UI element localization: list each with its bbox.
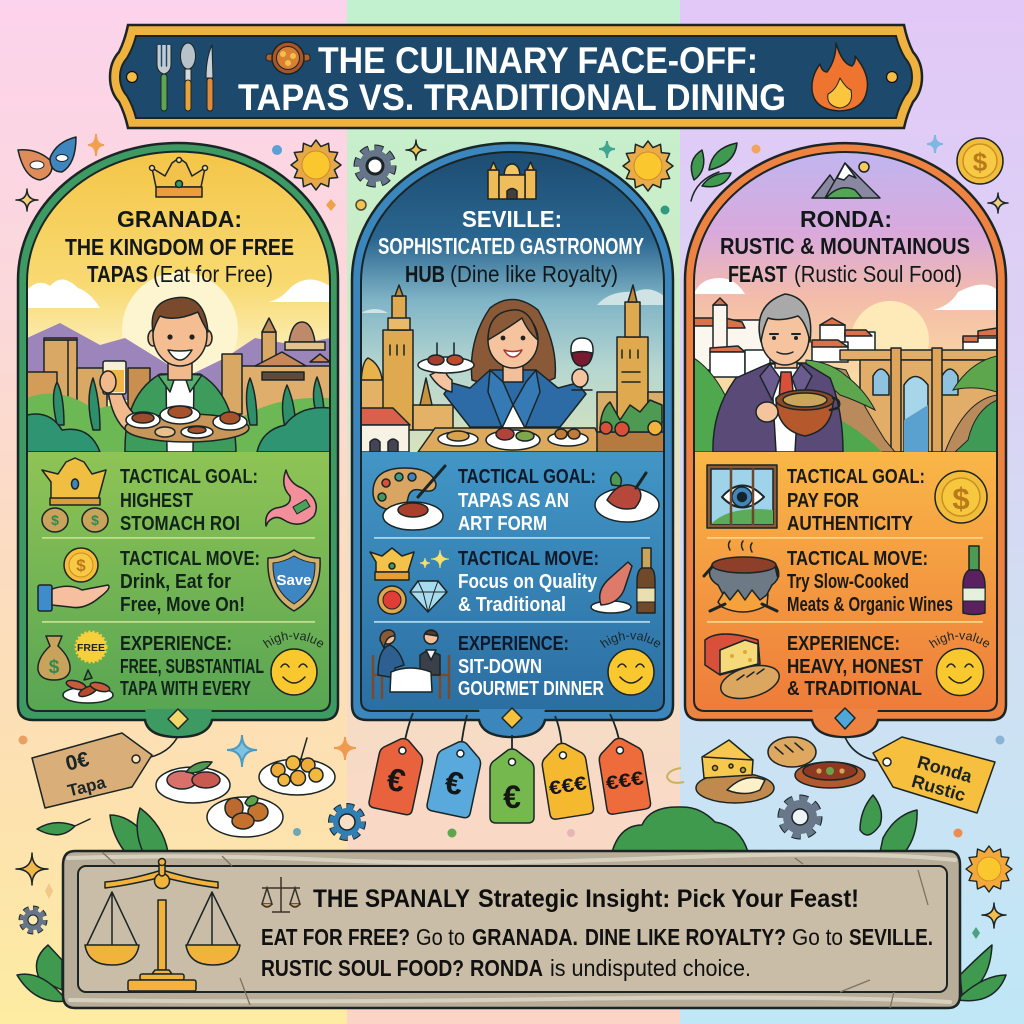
row: experience [37,630,324,704]
divider [707,621,983,623]
insight line one [261,924,933,950]
text: experience: HEAVY, HONEST [787,655,923,678]
icon: sausage plate [63,670,113,703]
tag string [136,738,177,759]
insight line one: Go to [416,924,465,950]
icon: stomach [266,470,316,526]
decorations: right top [691,135,1008,213]
text: experience: GOURMET DINNER [458,677,604,700]
row: tactical move [370,547,655,616]
background: left column [0,0,348,1024]
scene: Seville skyline [361,148,667,452]
tag: yellow euros [539,740,594,820]
icon: gear [359,150,391,182]
icon: wine bottle [637,548,655,613]
icon: notch star [502,708,522,728]
icon: leaves [691,143,737,201]
tag: Ronda Rustic: Rustic [909,771,968,805]
icon: dinner couple [373,630,449,698]
icon: swirl [667,768,684,783]
rim highlights [68,854,955,1002]
scene: Granada skyline [27,148,330,452]
background: middle column [347,0,681,1024]
icon: notch star [168,709,188,729]
heading: Granada: GRANADA: [117,206,242,232]
insight line two: RONDA [470,955,543,981]
icon: leaves left [17,945,66,1001]
icon: orange star [88,134,104,156]
divider [42,621,315,623]
tag: red euro [368,734,426,816]
row: tactical goal [373,465,659,535]
icon: teal star [599,141,615,158]
icon: flame [812,43,868,111]
tag: orange euros: €€€ [604,768,646,795]
background: right column [680,0,1024,1024]
icon: knife [206,45,213,111]
icon: gold star [406,140,426,160]
icon: notch star [835,708,855,729]
icon: gold star [16,189,38,211]
icon: coin [935,471,987,523]
text: move: Drink, Eat for [120,570,231,593]
inner border [694,152,997,711]
icon: crown with money bags [42,458,108,532]
insight heading: THE SPANALY [313,885,470,913]
plate: sliced meat [156,762,230,803]
text: experience [787,632,923,700]
teal dot [660,206,670,214]
plate: croquettes [207,796,283,837]
table with plates [418,400,667,452]
orange dot [18,736,28,744]
text: move: Meats & Organic Wines [787,593,953,616]
tag string [845,737,887,762]
icon: sun [623,141,673,191]
icon: smiley high-value: high-value [600,632,660,648]
heading: Ronda: (Rustic Soul Food) [794,261,962,287]
text: move: & Traditional [458,593,566,616]
tag body [32,733,152,808]
text: experience: TAPA WITH EVERY [120,677,251,700]
icon: money bag [38,636,70,680]
icon: gray gear [783,800,817,834]
notch [812,709,878,736]
icon: ruby [378,586,406,614]
heading: Ronda [720,206,970,287]
tag: green euro: € [503,779,521,815]
heading: Seville: SEVILLE: [462,206,562,232]
character: older man with pot [713,294,843,452]
heading: Ronda: RUSTIC & MOUNTAINOUS [720,233,970,259]
row: tactical move [38,547,320,616]
icon: leaves right [958,945,1006,1001]
text: goal: ART FORM [458,512,547,535]
text: goal: STOMACH ROI [120,512,240,535]
teal dot [293,828,301,836]
orange dot [752,144,760,154]
icon: sun [291,140,341,190]
text: experience: EXPERIENCE: [458,632,569,655]
heading: Granada: THE KINGDOM OF FREE [65,234,294,260]
icon: gold star [988,193,1008,213]
text: goal: TACTICAL GOAL: [120,465,258,488]
tag: Ronda Rustic [873,737,995,813]
notch [145,709,212,736]
text: goal [120,465,258,535]
divider [374,537,650,539]
heading: Granada: (Eat for Free) [153,261,273,287]
icon: cheese [705,634,760,675]
icon: cathedral [488,162,536,199]
text: goal [458,465,596,535]
icon: meat plate [595,472,659,522]
text: experience [120,632,264,700]
icon: cooking pot [704,541,779,612]
banner end dots [126,72,898,82]
heading: Seville: (Dine like Royalty) [450,261,618,287]
insight line one: DINE LIKE ROYALTY? [585,924,786,950]
text: move: TACTICAL MOVE: [787,547,928,570]
icon: blue gear [333,808,361,836]
text: goal: PAY FOR [787,489,859,512]
icon: small leaf [37,819,90,835]
banner inner plate [120,36,912,118]
heading: Seville: HUB [405,261,445,287]
price tags: middle [368,713,684,838]
icon: bread [717,660,783,704]
row: experience [372,629,660,700]
insight line one: EAT FOR FREE? [261,924,410,950]
icon: fork [157,45,171,111]
text: move: Free, Move On! [120,593,245,616]
tag: blue euro: € [442,763,467,802]
bread [768,737,816,767]
icon: gear left [23,910,43,930]
icon: gold star left [16,853,48,885]
text: experience: & TRADITIONAL [787,677,922,700]
panel: strategic insight [63,851,960,1008]
panel frame [685,143,1006,737]
plate: golden potatoes [259,738,335,795]
blue dot [996,736,1004,744]
heading: Ronda: FEAST [728,261,787,287]
tag text: Tapa [66,773,108,801]
title text: THE CULINARY FACE-OFF: [318,40,758,81]
food and tag: right [696,736,1004,852]
icon: coin in hand [38,548,109,611]
text: experience [458,632,604,700]
icon: smiley high-value: high-value [928,632,990,648]
tag: yellow euros: €€€ [547,773,589,800]
insight line two [261,955,751,981]
text: goal: TAPAS AS AN [458,489,569,512]
decorations: left top [16,134,341,211]
bowl of stew [795,762,865,788]
blue dot [272,145,282,155]
icon: large golden scale [85,858,240,991]
icon: smiley high-value: high-value [262,632,324,648]
character: young man with tapas tray [100,297,249,452]
title banner [110,25,922,128]
divider [707,537,983,539]
inner border [361,152,664,711]
icon: crown with money bags: $ [91,512,99,528]
title text [238,40,786,118]
board with cheese [696,740,774,803]
panel: Seville [350,142,674,738]
heading: Seville [378,206,644,287]
icon: spoon [180,43,196,111]
icon: orange star [334,737,356,760]
text: move [787,547,953,616]
icon: diamond [410,581,447,612]
icon: free burst [76,632,106,662]
text: goal: TACTICAL GOAL: [787,465,925,488]
gold diamond [45,883,53,899]
text: goal [787,465,925,535]
icon: money bag: $ [49,657,60,678]
heading: Ronda: RONDA: [800,206,892,232]
tag strings [404,713,620,759]
notch [479,709,545,736]
icon: paella pan [266,42,310,74]
icon: palette with pasta plate [373,466,445,530]
panel: Granada [16,142,340,738]
tag: 0 euro tapa [32,733,177,808]
text: goal: AUTHENTICITY [787,512,913,535]
icon: gold star right [982,903,1006,928]
insight line one: SEVILLE. [849,924,933,950]
green dot [448,828,456,838]
stone inner face [78,866,947,992]
heading: Granada: TAPAS [87,261,148,287]
banner frame [110,25,922,128]
icon: crown heading [150,158,208,197]
lower content area [27,452,330,711]
icon: smiley high-value [262,632,324,696]
icon: coin [957,138,1003,184]
icon: sparkles [420,550,449,568]
decorations: middle top [356,140,673,214]
text: experience: FREE, SUBSTANTIAL [120,655,264,678]
icon: gold crown [370,548,414,580]
tag: blue euro [426,737,484,819]
icon: green bush [612,807,748,852]
text: move [458,547,599,616]
text: move: Focus on Quality [458,570,597,593]
character: woman with wine [418,299,593,428]
icon: crown with money bags: $ [51,512,59,528]
icon: save shield: Save [276,572,312,589]
ring [356,200,366,210]
orange dot [954,828,962,838]
icon: save shield [268,550,320,611]
cliffs [806,362,895,452]
row: tactical goal [42,458,316,535]
panel frame [18,143,338,737]
divider [374,621,650,623]
scene: Ronda bridge [694,148,1000,452]
money in stomach [293,500,310,514]
insight heading: Strategic Insight: Pick Your Feast! [478,885,859,913]
row: experience [704,632,990,700]
text: experience: EXPERIENCE: [120,632,232,655]
icon: big leaves [110,808,168,852]
text: experience: EXPERIENCE: [787,632,900,655]
heading: Granada [65,206,294,287]
panel: Ronda [684,142,1008,738]
text: move [120,547,260,616]
icon: blue star [227,735,257,767]
icon: coin: $ [952,481,970,516]
icon: mountains [812,162,880,198]
text: move: TACTICAL MOVE: [120,547,260,570]
tag hole [132,755,140,763]
muted dot [567,829,575,837]
decorations: bottom corners [16,846,1012,1001]
text: move: Try Slow-Cooked [787,570,909,593]
insight line two: is undisputed choice. [550,955,751,981]
tag: green euro [490,749,534,823]
tag: red euro: € [384,760,409,799]
insight line two: RUSTIC SOUL FOOD? [261,955,464,981]
icon: coin: $ [973,147,988,177]
text: experience: SIT-DOWN [458,655,542,678]
insight line one: GRANADA. [472,924,578,950]
heading: Seville: SOPHISTICATED GASTRONOMY [378,233,644,259]
icon: sun right [966,846,1012,892]
green diamond [972,927,980,939]
icon: carnival masks [18,137,76,180]
icon: small scale [262,877,300,912]
icon: wine bottle [963,546,985,614]
text: goal: TACTICAL GOAL: [458,465,596,488]
tag: orange euros [596,735,651,815]
icon: free burst: FREE [77,642,105,654]
lower content area [694,452,997,711]
row: tactical goal [707,465,987,535]
text: move: TACTICAL MOVE: [458,547,599,570]
icon: window with eye [707,465,777,528]
icon: leaves [860,795,917,852]
tag text [63,748,108,801]
icon: coin in hand: $ [76,556,86,575]
insight line one: Go to [792,924,843,950]
icon: smiley high-value [600,632,660,696]
food plates: left [18,735,361,852]
divider [42,537,315,539]
title text: TAPAS VS. TRADITIONAL DINING [238,77,786,118]
row: tactical move [704,541,985,616]
inner border [27,152,330,711]
tag text: 0€ [63,748,92,776]
text: goal: HIGHEST [120,489,193,512]
cracks [102,852,928,1008]
stone slab [63,851,960,1008]
icon: blue star [927,135,943,153]
insight heading [313,885,859,913]
orange diamond [326,199,336,211]
panel frame [352,143,673,737]
icon: smiley high-value [928,632,990,696]
icon: ham [591,562,632,613]
lower content area [361,452,664,711]
tag: Ronda Rustic: Ronda [915,752,975,787]
